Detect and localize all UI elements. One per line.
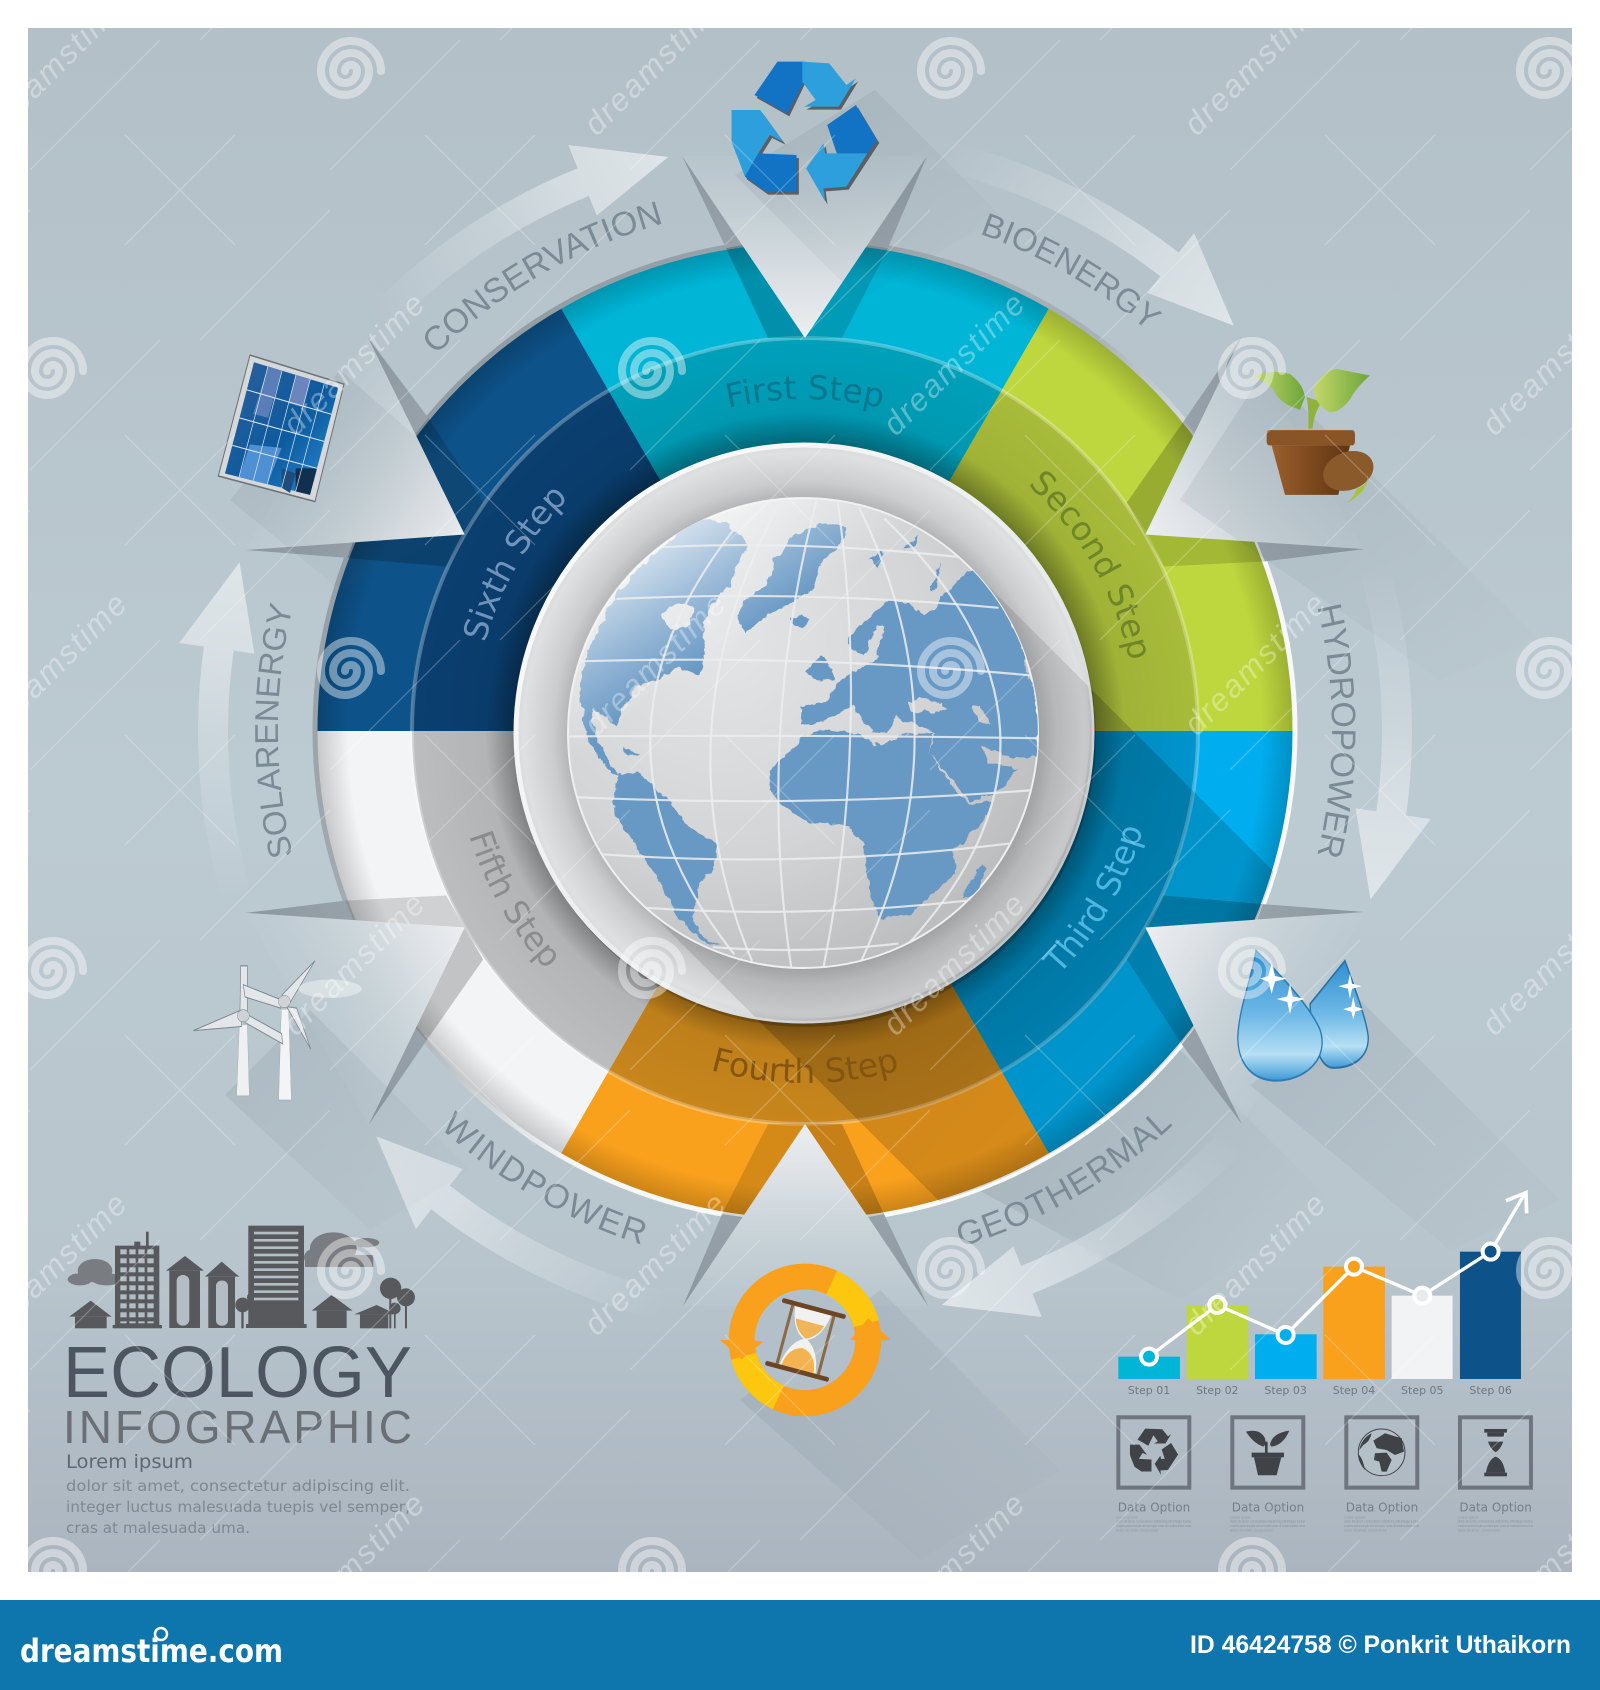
- icon: seedling in pot: [1252, 369, 1375, 503]
- step labels: Step 06: [1469, 1384, 1512, 1397]
- data option: recycle: Lorem ipsum: [1116, 1515, 1137, 1519]
- step labels: Step 04: [1333, 1384, 1375, 1397]
- globe: [566, 498, 1038, 969]
- body text: [66, 1477, 410, 1537]
- ring shading: [316, 242, 1294, 1220]
- data option: recycle: dolor sit amet, consectetur: [1116, 1528, 1160, 1532]
- data option: plant: malesuada tuepis vel semper cras at malesuada uma: [1230, 1524, 1306, 1528]
- segment: first step cyan: [560, 242, 1050, 731]
- segment: fourth step orange: [560, 731, 1050, 1220]
- watermark: dreamstime text: dreamstime: [275, 284, 433, 442]
- heading: lorem ipsum: Lorem ipsum: [66, 1451, 193, 1473]
- long shadow fading outside the wheel: [980, 1050, 1230, 1242]
- inner band: second: [805, 391, 1198, 731]
- band divider line: [412, 338, 1198, 1124]
- globe highlight: [571, 499, 869, 732]
- watermark: dreamstime text: dreamstime: [576, 584, 734, 742]
- watermark: dreamstime text: dreamstime: [576, 1184, 734, 1342]
- footer credit: ID 46424758 © Ponkrit Uthaikorn: [1190, 1631, 1571, 1659]
- centre plate: [514, 442, 1096, 1027]
- wedge: lower right: [1084, 821, 1364, 1124]
- icon: recycle: [732, 62, 879, 205]
- step labels: Step 02: [1196, 1384, 1239, 1397]
- label: windpower: WINDPOWER: [445, 1110, 646, 1244]
- ring outer rim: [315, 241, 1295, 1221]
- segment: sixth step navy: [316, 308, 805, 731]
- label: fifth step: Fifth Step: [470, 831, 556, 966]
- data option: plant: Lorem ipsum: [1230, 1515, 1251, 1519]
- data option: globe: malesuada tuepis vel semper cras at malesuada uma: [1344, 1524, 1420, 1528]
- footer logo: dreamstime.com: [20, 1632, 283, 1670]
- icon: hourglass in circular arrows: [720, 1277, 891, 1403]
- inner band: sixth: [412, 391, 805, 731]
- inner band: fourth: [608, 731, 1002, 1124]
- data option: recycle: dolor sit amet, consectetur adipiscing elit integer luctus: [1116, 1520, 1191, 1524]
- icon: water drops: [1238, 951, 1368, 1081]
- label: third step: Third Step: [1041, 827, 1145, 968]
- data option: recycle: malesuada tuepis vel semper cras at malesuada uma: [1116, 1524, 1192, 1528]
- footer bar: [0, 1600, 1600, 1690]
- data option: hourglass: Data Option: [1459, 1501, 1532, 1515]
- data option: globe: Lorem ipsum: [1344, 1515, 1365, 1519]
- step labels: Step 05: [1401, 1384, 1444, 1397]
- label: fourth step: Fourth Step: [713, 1048, 896, 1083]
- data option: globe: dolor sit amet, consectetur adipiscing elit integer luctus: [1344, 1520, 1419, 1524]
- continents: [579, 519, 1038, 947]
- circular arrows around the wheel: [79, 60, 1531, 1402]
- data option: hourglass: [1458, 1417, 1534, 1532]
- colour wheel: six step segments: [315, 241, 1295, 1221]
- arc labels: [255, 202, 1356, 1244]
- watermark: dreamstime text: dreamstime: [875, 284, 1033, 442]
- label: sixth step: Sixth Step: [464, 490, 564, 640]
- watermark: dreamstime text: dreamstime: [1176, 1184, 1334, 1342]
- watermark: dreamstime text: dreamstime: [1176, 584, 1334, 742]
- data option: globe: Data Option: [1346, 1501, 1418, 1515]
- label: second step: Second Step: [1030, 471, 1146, 658]
- inner band: first: [608, 338, 1002, 731]
- data option: plant: [1230, 1417, 1306, 1532]
- segment: fifth step white: [316, 731, 805, 1154]
- data option: plant: dolor sit amet, consectetur adipiscing elit integer luctus: [1230, 1520, 1305, 1524]
- data option: hourglass: dolor sit amet, consectetur adipiscing elit integer luctus: [1458, 1520, 1533, 1524]
- step labels: [1128, 1384, 1512, 1397]
- body text: integer luctus malesuada tuepis vel semper,: [66, 1498, 410, 1516]
- bars: [1118, 1252, 1521, 1379]
- step labels: [464, 374, 1146, 1083]
- bar chart with line: [1116, 1193, 1534, 1532]
- watermark: dreamstime text: dreamstime: [875, 884, 1033, 1042]
- step labels: Step 03: [1264, 1384, 1307, 1397]
- icon: wind turbines: [193, 961, 362, 1100]
- arched houses: [166, 1256, 239, 1328]
- title block: [63, 1333, 412, 1537]
- city skyline: [68, 1226, 415, 1328]
- long shadow of the globe across wheel: [758, 690, 1274, 1201]
- data option: hourglass: malesuada tuepis vel semper cras at malesuada uma: [1458, 1524, 1534, 1528]
- wedge: bottom: [683, 1124, 928, 1306]
- body text: dolor sit amet, consectetur adipiscing elit.: [66, 1477, 410, 1495]
- step labels: Step 01: [1128, 1384, 1170, 1397]
- clouds: [68, 1232, 379, 1285]
- body text: cras at malesuada uma.: [66, 1519, 250, 1537]
- watermark: dreamstime text: dreamstime: [875, 1484, 1033, 1642]
- wedge: lower left: [246, 822, 526, 1125]
- footer logo spiral: [155, 1628, 167, 1640]
- data option: plant: Data Option: [1232, 1501, 1304, 1515]
- data option: plant: dolor sit amet, consectetur: [1230, 1528, 1274, 1532]
- wedge: top: [682, 156, 927, 338]
- inner band: fifth: [412, 731, 805, 1071]
- label: geothermal: GEOTHERMAL: [958, 1116, 1172, 1244]
- segment: second step green: [805, 308, 1294, 731]
- label: first step: First Step: [726, 374, 882, 412]
- label: solarenergy: SOLARENERGY: [255, 602, 292, 857]
- title: ecology: ECOLOGY: [63, 1333, 412, 1413]
- icon: solar panel: [218, 355, 344, 502]
- data option: recycle: Data Option: [1118, 1501, 1190, 1515]
- pointed wedges between the arrows: [246, 156, 1364, 1306]
- trees: [380, 1278, 415, 1328]
- wedge: upper left: [246, 338, 526, 641]
- data option: hourglass: dolor sit amet, consectetur: [1458, 1528, 1501, 1532]
- label: hydropower: HYDROPOWER: [1318, 604, 1356, 857]
- label: conservation: CONSERVATION: [425, 202, 662, 350]
- long icon shadows: [226, 90, 1432, 1452]
- small houses: [69, 1295, 397, 1328]
- wedge: upper right: [1084, 337, 1364, 640]
- data option: globe: [1344, 1417, 1420, 1532]
- trees by tower: [235, 1293, 256, 1328]
- label: bioenergy: BIOENERGY: [982, 214, 1162, 326]
- data option: recycle: [1116, 1417, 1192, 1532]
- subtitle: infographic: INFOGRAPHIC: [63, 1401, 412, 1453]
- watermark: dreamstime text: dreamstime: [275, 1484, 433, 1642]
- inner band: third: [805, 731, 1198, 1071]
- striped skyscraper: [246, 1226, 307, 1328]
- office tower: [113, 1232, 162, 1328]
- data option: hourglass: Lorem ipsum: [1458, 1515, 1479, 1519]
- globe grid: [566, 501, 1038, 969]
- data option: globe: dolor sit amet, consectetur: [1344, 1528, 1388, 1532]
- segment: third step blue: [805, 731, 1294, 1154]
- watermark: dreamstime text: dreamstime: [275, 884, 433, 1042]
- trend line with arrow: [1141, 1193, 1527, 1365]
